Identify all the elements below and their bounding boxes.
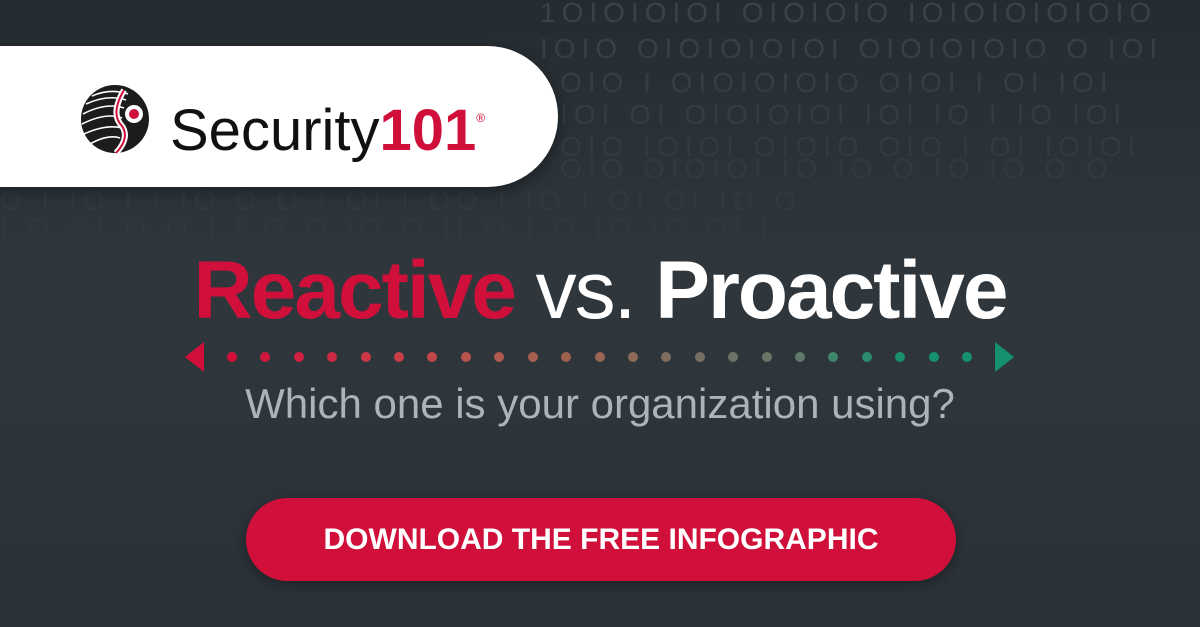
binary background pattern: OIO IOIOI OIOIO OIO I OI IOIOI xyxy=(560,131,1141,162)
right arrow xyxy=(995,342,1014,372)
scale arrow with dots xyxy=(185,342,1014,372)
binary background pattern: O I I O I O O I O xyxy=(0,239,304,270)
logo pill xyxy=(0,46,558,187)
button: DOWNLOAD THE FREE INFOGRAPHIC xyxy=(324,523,878,556)
binary background pattern: OIO OIOIOI IO IO O IO IO O O xyxy=(560,153,1114,184)
left arrow xyxy=(185,342,204,372)
binary background pattern: IOI OI OIOIOIOI IOI IO I IO IOI xyxy=(560,99,1127,130)
binary background pattern: OIO I OIOIOIOIO OIOI I OI IOI xyxy=(560,67,1114,98)
button xyxy=(246,498,956,581)
logo text: Security101® xyxy=(170,98,485,163)
binary background pattern: IOIO OIOIOIOIOI OIOIOIOIO O IOI xyxy=(540,33,1163,64)
binary background pattern: O I IO I I IO O O I OI I OO I IO I OI OI IO O xyxy=(0,185,802,216)
subtitle: Which one is your organization using? xyxy=(245,380,955,427)
icon: logo globe xyxy=(81,85,149,154)
binary background pattern xyxy=(542,2,1154,166)
binary background pattern: I O OI O O I I O O IO O II O I O IO IO OI I xyxy=(0,213,775,244)
title: Reactive vs. Proactive xyxy=(194,245,1006,336)
